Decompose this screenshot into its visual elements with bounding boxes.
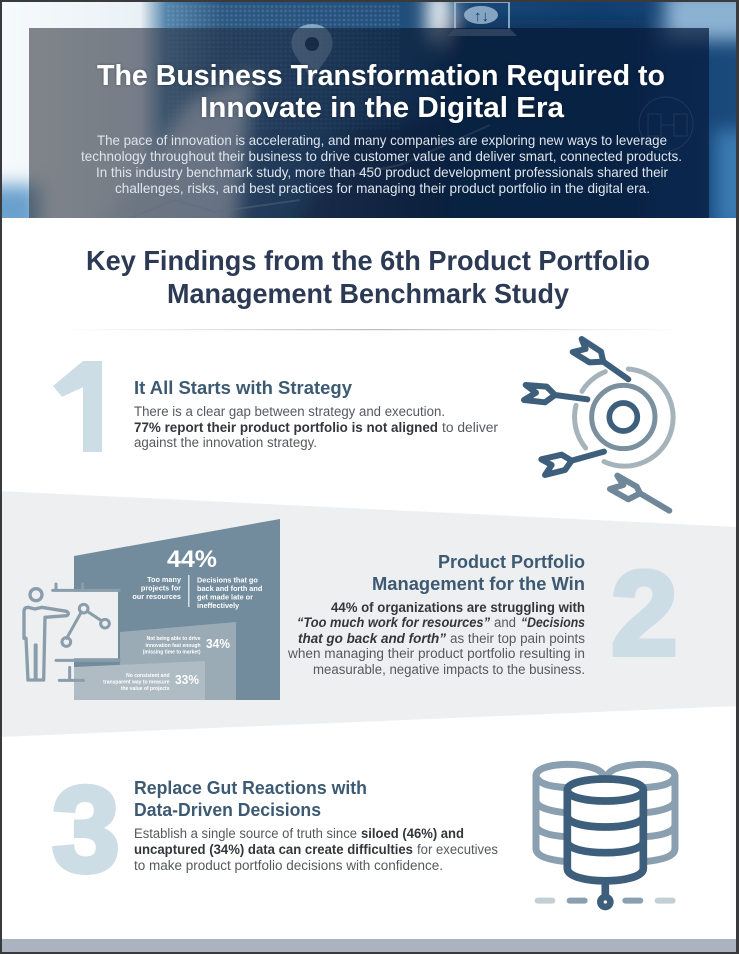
icon: presenter with board bbox=[24, 584, 119, 680]
text: finding 1 body: against the innovation strategy. bbox=[134, 435, 317, 450]
hero title: Innovate in the Digital Era bbox=[200, 92, 565, 124]
text: finding 1 body bbox=[134, 404, 499, 450]
text: measuring value: the value of projects bbox=[121, 686, 170, 692]
icon: cloud laptop: ↑↓ bbox=[474, 8, 489, 25]
text: finding 3 body: Establish a single source of truth since bbox=[134, 826, 357, 841]
footer band bbox=[0, 939, 739, 952]
text: decisions bbox=[197, 576, 262, 610]
text: too many projects: projects for bbox=[141, 584, 181, 592]
text: finding 2 body: when managing their product portfolio resulting in bbox=[287, 646, 585, 661]
text: measuring value: transparent way to measure bbox=[103, 680, 170, 686]
icon: growth arrow bbox=[237, 124, 490, 210]
panel: finding 2 bbox=[0, 491, 739, 737]
text: finding 2 body: 44% of organizations are struggling with bbox=[331, 600, 585, 615]
number 1: 1 bbox=[46, 340, 136, 479]
icon: cloud laptop bbox=[447, 2, 517, 36]
hero title bbox=[97, 60, 665, 124]
stat: 44%: 44% bbox=[167, 546, 217, 573]
text: finding 2 body: as their top pain points bbox=[450, 631, 585, 646]
text: finding 2 body bbox=[287, 600, 585, 677]
heading: finding 2 bbox=[372, 552, 585, 594]
text: finding 2 body: and bbox=[494, 615, 516, 630]
text: decisions: get made late or bbox=[197, 592, 253, 602]
slanted grey band bbox=[0, 491, 739, 737]
text: too many projects: Too many bbox=[147, 575, 182, 584]
hero intro paragraph: challenges, risks, and best practices for managing their product portfolio in the digital era. bbox=[115, 180, 650, 196]
text: finding 1 body: There is a clear gap between strategy and execution. bbox=[134, 404, 445, 419]
heading: finding 2: Management for the Win bbox=[372, 574, 585, 594]
icon: location pin bbox=[291, 24, 333, 82]
text: finding 2 body: measurable, negative impacts to the business. bbox=[313, 662, 585, 677]
text: innovation speed: (missing time to market) bbox=[143, 650, 201, 656]
text: measuring value: No consistent and bbox=[126, 673, 170, 679]
text: decisions: ineffectively bbox=[197, 601, 240, 610]
text: finding 3 body: to make product portfolio decisions with confidence. bbox=[134, 858, 443, 873]
text: finding 3 body: siloed (46%) and bbox=[361, 826, 464, 841]
hero dark overlay panel bbox=[29, 28, 709, 218]
number 2: 2 bbox=[611, 546, 678, 680]
main heading bbox=[86, 245, 650, 309]
panel: finding 3 bbox=[52, 761, 675, 910]
hero intro paragraph: In this industry benchmark study, more than 450 product development professionals shared their bbox=[96, 164, 668, 180]
text: finding 2 body: that go back and forth” bbox=[298, 631, 446, 646]
hero intro paragraph: The pace of innovation is accelerating, and many companies are exploring new ways to leverage bbox=[97, 132, 667, 148]
text: measuring value bbox=[103, 673, 170, 692]
text: decisions: back and forth and bbox=[197, 584, 262, 593]
main heading: Key Findings from the 6th Product Portfolio bbox=[86, 245, 650, 276]
main heading: Management Benchmark Study bbox=[167, 278, 569, 309]
hero photo background bbox=[0, 0, 739, 235]
heading: finding 1: It All Starts with Strategy bbox=[134, 378, 352, 398]
heading: finding 3: Data-Driven Decisions bbox=[134, 800, 321, 820]
text: finding 3 body: uncaptured (34%) data can create difficulties bbox=[134, 842, 413, 857]
text: finding 3 body: for executives bbox=[417, 842, 498, 857]
text: innovation speed: Not being able to drive bbox=[147, 636, 201, 642]
text: finding 2 body: “Decisions bbox=[521, 615, 585, 630]
icon: target with darts bbox=[524, 339, 673, 511]
icon: phones bbox=[639, 97, 693, 151]
text: innovation speed bbox=[143, 636, 201, 656]
heading: finding 3 bbox=[134, 778, 367, 820]
hero intro paragraph bbox=[81, 132, 682, 196]
text: decisions: Decisions that go bbox=[197, 576, 258, 584]
text: finding 1 body: 77% report their product portfolio is not aligned bbox=[134, 420, 438, 435]
text: too many projects bbox=[132, 575, 182, 601]
stat: 33%: 33% bbox=[175, 672, 199, 687]
text: finding 2 body: “Too much work for resources” bbox=[297, 615, 490, 630]
icon: databases bbox=[536, 764, 675, 910]
number 3: 3 bbox=[52, 761, 120, 897]
text: finding 3 body bbox=[134, 826, 498, 873]
text: too many projects: our resources bbox=[132, 592, 181, 601]
hero banner bbox=[0, 0, 739, 235]
heading: finding 3: Replace Gut Reactions with bbox=[134, 778, 367, 798]
stat: 34%: 34% bbox=[206, 636, 230, 651]
text: finding 1 body: to deliver bbox=[442, 420, 499, 435]
text: innovation speed: innovation fast enough bbox=[146, 643, 200, 649]
panel: finding 1 bbox=[46, 339, 673, 511]
hero intro paragraph: technology throughout their business to drive customer value and deliver smart, connected products. bbox=[81, 148, 682, 164]
hero title: The Business Transformation Required to bbox=[97, 60, 665, 92]
heading: finding 2: Product Portfolio bbox=[438, 552, 585, 572]
stepped bar chart bbox=[74, 519, 280, 700]
